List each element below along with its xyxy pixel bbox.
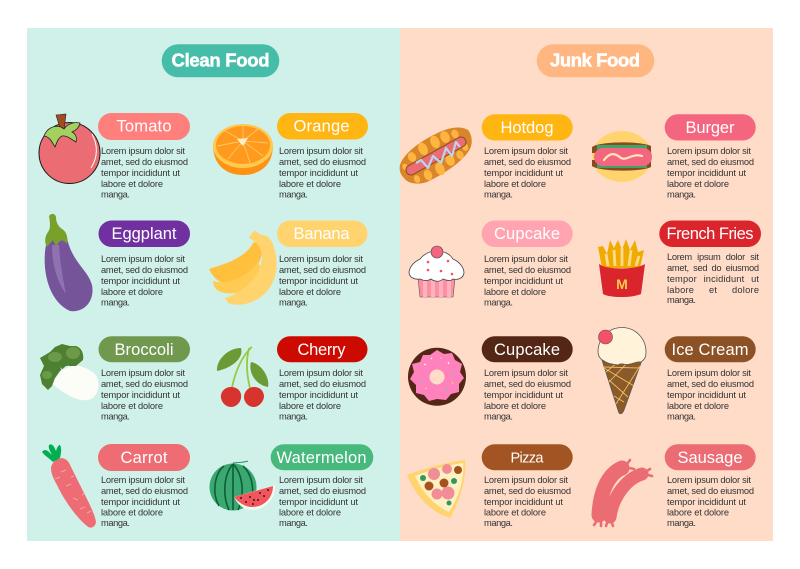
text: Watermelon description: Lorem ipsum dolor sit: [279, 475, 363, 485]
text: Carrot description: amet, sed do eiusmod: [101, 486, 188, 496]
pill: Orange: Orange: [294, 118, 350, 136]
text: Watermelon description: amet, sed do eiusmod: [279, 486, 366, 496]
pill: Eggplant: Eggplant: [112, 225, 177, 243]
pill: Broccoli: Broccoli: [114, 341, 174, 359]
text: Ice Cream description: [667, 368, 754, 422]
text: Hotdog description: manga.: [484, 190, 513, 200]
heading: Clean Food: [162, 44, 279, 77]
text: Pizza description: labore et dolore: [484, 508, 546, 518]
text: Eggplant description: [101, 254, 188, 308]
heading: Junk Food: [537, 44, 654, 77]
text: Tomato description: tempor incididunt ut: [101, 168, 180, 178]
text: French Fries description (justified): labore et dolore: [667, 285, 759, 295]
icon: watermelon: [210, 461, 275, 510]
text: Cherry description: amet, sed do eiusmod: [279, 379, 366, 389]
text: Cherry description: labore et dolore: [279, 401, 341, 411]
text: Broccoli description: labore et dolore: [101, 401, 163, 411]
text: Cupcake description: Lorem ipsum dolor sit: [484, 254, 568, 264]
text: Cupcake (dark) description: [484, 368, 571, 422]
text: Pizza description: [484, 475, 571, 528]
pill: Ice Cream: Ice Cream: [672, 341, 748, 359]
pill: Ice Cream: [665, 336, 756, 362]
text: French Fries description (justified): Lorem ipsum dolor sit: [667, 252, 759, 262]
pill: Cupcake (dark): [482, 336, 573, 362]
icon: ice cream: [598, 328, 646, 414]
text: Burger description: amet, sed do eiusmod: [667, 157, 754, 167]
text: Banana description: [279, 254, 366, 308]
text: Burger description: Lorem ipsum dolor sit: [667, 146, 751, 156]
pill: Banana: Banana: [294, 225, 350, 243]
text: Pizza description: Lorem ipsum dolor sit: [484, 475, 568, 485]
text: Ice Cream description: amet, sed do eiusmod: [667, 379, 754, 389]
text: Banana description: manga.: [279, 298, 308, 308]
text: Carrot description: manga.: [101, 518, 130, 528]
text: Carrot description: tempor incididunt ut: [101, 497, 180, 507]
icon: donut: [408, 348, 466, 406]
text: Tomato description: amet, sed do eiusmod: [101, 157, 188, 167]
text: Tomato description: [101, 146, 188, 200]
pill: Sausage: Sausage: [678, 449, 742, 467]
icon: pizza: [407, 460, 465, 518]
pill: Carrot: [98, 444, 190, 471]
text: Broccoli description: manga.: [101, 412, 130, 422]
text: Orange description: Lorem ipsum dolor sit: [279, 146, 363, 156]
text: Eggplant description: manga.: [101, 298, 130, 308]
text: Cherry description: Lorem ipsum dolor sit: [279, 368, 363, 378]
text: French Fries description (justified): amet, sed do eiusmod: [667, 263, 759, 273]
pill: Cherry: [277, 336, 368, 362]
text: Sausage description: [667, 475, 754, 528]
text: Hotdog description: [484, 146, 571, 200]
icon: broccoli: [40, 344, 99, 400]
text: Ice Cream description: labore et dolore: [667, 401, 729, 411]
text: Sausage description: manga.: [667, 518, 696, 528]
text: Eggplant description: Lorem ipsum dolor sit: [101, 254, 185, 264]
text: Broccoli description: tempor incididunt ut: [101, 390, 180, 400]
pill: Watermelon: Watermelon: [276, 449, 366, 467]
pill: Carrot: Carrot: [120, 449, 168, 467]
pill: Pizza: [482, 444, 573, 470]
text: Cupcake (dark) description: manga.: [484, 412, 513, 422]
text: French Fries description (justified): [667, 252, 759, 305]
pill: French Fries: French Fries: [666, 225, 754, 243]
icon: burger: [592, 131, 652, 182]
text: Cherry description: manga.: [279, 412, 308, 422]
text: French Fries description (justified): tempor incididunt ut: [667, 274, 759, 284]
text: Cupcake description: tempor incididunt ut: [484, 276, 563, 286]
text: Cherry description: [279, 368, 366, 422]
icon: orange: [213, 124, 273, 175]
icon: carrot: [42, 444, 96, 528]
icon: banana: [209, 231, 277, 305]
text: Carrot description: labore et dolore: [101, 508, 163, 518]
text: Watermelon description: manga.: [279, 518, 308, 528]
pill: Orange: [277, 113, 368, 140]
text: Sausage description: Lorem ipsum dolor sit: [667, 475, 751, 485]
text: Hotdog description: tempor incididunt ut: [484, 168, 563, 178]
pill: Banana: [277, 220, 368, 247]
text: Cupcake (dark) description: labore et dolore: [484, 401, 546, 411]
text: Broccoli description: [101, 368, 188, 422]
text: Banana description: tempor incididunt ut: [279, 276, 358, 286]
text: Pizza description: amet, sed do eiusmod: [484, 486, 571, 496]
text: Tomato description: Lorem ipsum dolor sit: [101, 146, 185, 156]
pill: Burger: [665, 114, 756, 140]
icon: eggplant: [45, 214, 93, 311]
text: Orange description: tempor incididunt ut: [279, 168, 358, 178]
heading: Junk Food: Junk Food: [550, 50, 640, 70]
text: Watermelon description: tempor incididunt ut: [279, 497, 358, 507]
pill: Cupcake: [482, 220, 573, 247]
text: Hotdog description: amet, sed do eiusmod: [484, 157, 571, 167]
text: Banana description: Lorem ipsum dolor sit: [279, 254, 363, 264]
text: Orange description: labore et dolore: [279, 179, 341, 189]
text: Tomato description: labore et dolore: [101, 179, 163, 189]
text: Hotdog description: labore et dolore: [484, 179, 546, 189]
text: Ice Cream description: Lorem ipsum dolor sit: [667, 368, 751, 378]
text: Eggplant description: tempor incididunt ut: [101, 276, 180, 286]
icon: hotdog: [400, 127, 472, 184]
text: Watermelon description: labore et dolore: [279, 508, 341, 518]
text: Eggplant description: amet, sed do eiusmod: [101, 265, 188, 275]
pill: French Fries: [659, 220, 761, 247]
text: Orange description: manga.: [279, 190, 308, 200]
icon: sausages: [594, 460, 652, 526]
pill: Hotdog: [482, 114, 573, 140]
text: Pizza description: tempor incididunt ut: [484, 497, 563, 507]
text: Tomato description: manga.: [101, 190, 130, 200]
text: Eggplant description: labore et dolore: [101, 287, 163, 297]
text: Broccoli description: amet, sed do eiusmod: [101, 379, 188, 389]
text: Cupcake description: manga.: [484, 298, 513, 308]
text: Orange description: [279, 146, 366, 200]
text: Sausage description: tempor incididunt ut: [667, 497, 746, 507]
text: Burger description: manga.: [667, 190, 696, 200]
text: Carrot description: Lorem ipsum dolor sit: [101, 475, 185, 485]
text: Burger description: labore et dolore: [667, 179, 729, 189]
text: Burger description: tempor incididunt ut: [667, 168, 746, 178]
icon: tomato: [39, 114, 100, 184]
text: Sausage description: amet, sed do eiusmod: [667, 486, 754, 496]
text: Cherry description: tempor incididunt ut: [279, 390, 358, 400]
icon: cherry: [217, 347, 268, 407]
pill: Hotdog: Hotdog: [500, 119, 554, 137]
text: Carrot description: [101, 475, 188, 528]
text: Cupcake description: amet, sed do eiusmod: [484, 265, 571, 275]
pill: Cupcake (dark): Cupcake: [494, 341, 560, 359]
text: Hotdog description: Lorem ipsum dolor sit: [484, 146, 568, 156]
pill: Sausage: [665, 444, 756, 470]
pill: Eggplant: [98, 220, 190, 247]
panel: clean food: [27, 28, 400, 541]
icon: french fries: [598, 239, 645, 297]
text: French Fries description (justified): manga.: [667, 295, 696, 305]
text: Ice Cream description: tempor incididunt ut: [667, 390, 746, 400]
text: Cupcake (dark) description: amet, sed do eiusmod: [484, 379, 571, 389]
text: Ice Cream description: manga.: [667, 412, 696, 422]
pill: Watermelon: [271, 444, 373, 470]
pill: Tomato: [98, 113, 190, 140]
pill: Broccoli: [98, 336, 190, 362]
text: Banana description: labore et dolore: [279, 287, 341, 297]
panel: junk food: [400, 28, 773, 541]
text: Cupcake (dark) description: Lorem ipsum dolor sit: [484, 368, 568, 378]
text: Cupcake description: labore et dolore: [484, 287, 546, 297]
text: Watermelon description: [279, 475, 366, 528]
text: Broccoli description: Lorem ipsum dolor sit: [101, 368, 185, 378]
text: Burger description: [667, 146, 754, 200]
icon: cupcake: [409, 246, 464, 297]
icon: french fries: M: [616, 276, 628, 292]
pill: Tomato: Tomato: [116, 118, 172, 136]
pill: Cupcake: Cupcake: [494, 225, 560, 243]
text: Sausage description: labore et dolore: [667, 508, 729, 518]
text: Banana description: amet, sed do eiusmod: [279, 265, 366, 275]
pill: Pizza: Pizza: [510, 450, 544, 466]
text: Cupcake description: [484, 254, 571, 308]
pill: Burger: Burger: [686, 119, 735, 137]
heading: Clean Food: Clean Food: [172, 50, 270, 70]
pill: Cherry: Cherry: [298, 341, 346, 359]
text: Orange description: amet, sed do eiusmod: [279, 157, 366, 167]
text: Pizza description: manga.: [484, 518, 513, 528]
text: Cupcake (dark) description: tempor incididunt ut: [484, 390, 563, 400]
